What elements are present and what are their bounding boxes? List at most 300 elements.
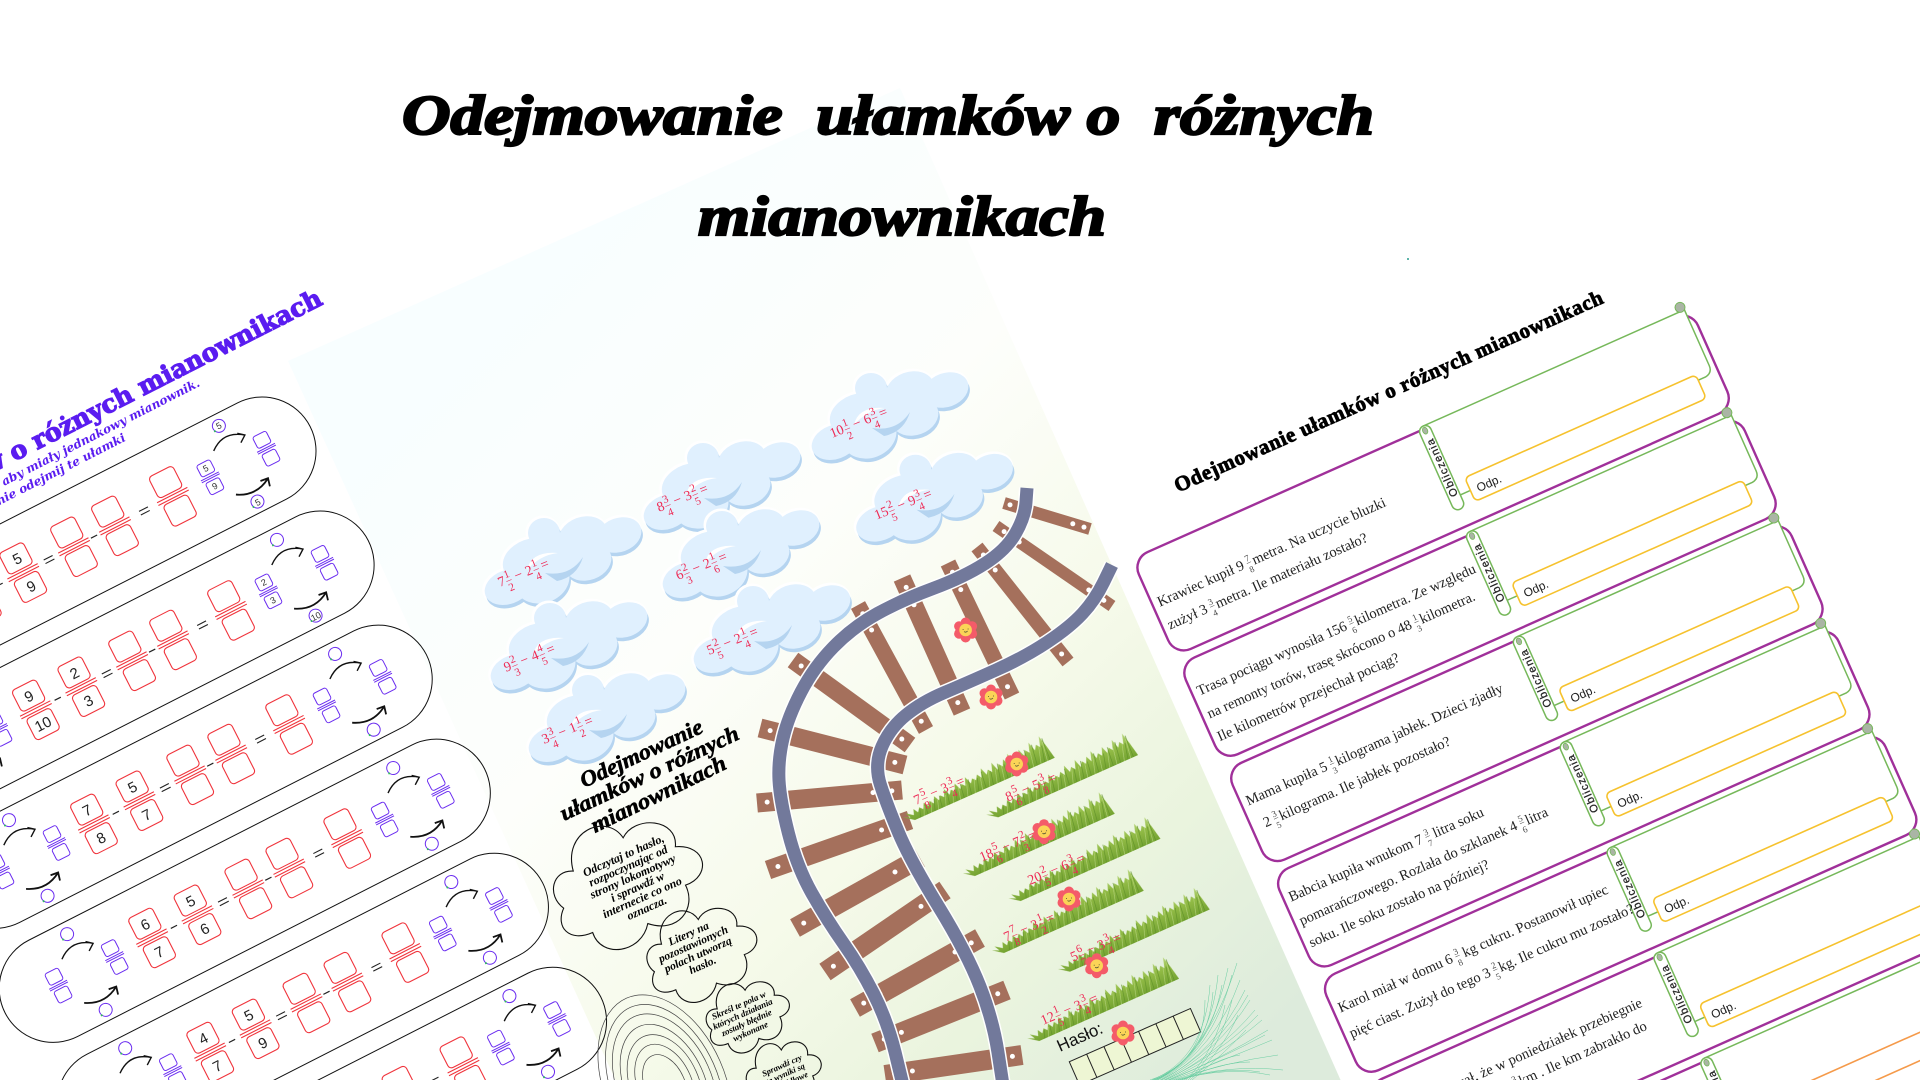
exercise row 5	[39, 835, 567, 1080]
task card 2: 6	[1350, 624, 1359, 635]
cloud exercise 8¾ − 3⅖	[638, 434, 807, 540]
grass exercise 12⅕ − 3¾: 5	[1056, 1016, 1067, 1029]
cloud exercise 7½ − 2¼: =	[538, 557, 551, 574]
small teal dot	[1407, 258, 1409, 260]
grass exercise 5 6/7 − 3¾	[1050, 885, 1210, 976]
cloud exercise 9⅔ − 4⅘: −	[518, 652, 531, 669]
cloud exercise 5⅖ − 2¼: 5	[705, 642, 717, 659]
cloud exercise 15⅖ − 9¾	[850, 445, 1019, 551]
instruction cloud 3: wykonane	[731, 1019, 770, 1043]
grass exercise 8⅚ − 5⅜: –	[1011, 788, 1022, 802]
task card 3: Mama kupiła 5	[1243, 759, 1330, 809]
railway rails	[779, 488, 1112, 1080]
grass exercise 8⅚ − 5⅜	[978, 731, 1138, 821]
middle worksheet background	[288, 88, 1345, 1080]
grass exercise 5 6/7 − 3¾: −	[1085, 942, 1098, 959]
grass exercise 7⅝ − 3¾: −	[928, 785, 941, 802]
instruction cloud 2: polach utworzą	[662, 935, 734, 976]
task card 4: Obliczenia	[1565, 752, 1602, 814]
task card 4: soku. Ile soku zostało na później?	[1307, 857, 1492, 951]
cloud exercise 9⅔ − 4⅘: 9	[502, 659, 514, 676]
task card 5	[1315, 720, 1920, 1077]
exercise row 2	[0, 492, 393, 833]
grass exercise 7⅞ − 3½	[984, 867, 1144, 957]
grass exercise 7⅞ − 3½: 7	[1008, 922, 1018, 936]
main title: Odejmowanie ułamków o różnych	[402, 85, 1374, 147]
cloud exercise 6⅔ − 2⅙: –	[708, 555, 719, 569]
grass exercise 20⅖ − 6¾: 20	[1026, 869, 1044, 889]
grass exercise 18⅚ − 7⅔: =	[1026, 828, 1039, 845]
task card 4: 3	[1422, 826, 1430, 838]
cloud exercise 3¾ − 1½: –	[547, 730, 558, 744]
task card 4: Odp.	[1615, 788, 1644, 811]
task card 1: Krawiec kupił 9	[1155, 558, 1247, 610]
task card 3	[1221, 510, 1828, 866]
cloud exercise 15⅖ − 9¾: 2	[885, 498, 894, 511]
cloud exercise 10½ − 6¾: =	[877, 405, 890, 422]
grass exercise 7⅞ − 3½: 2	[1040, 924, 1050, 937]
task card 3: Odp.	[1568, 682, 1598, 706]
cloud exercise 7½ − 2¼: −	[512, 567, 525, 584]
cloud exercise 3¾ − 1½: –	[574, 719, 585, 733]
task card 4: litra	[1523, 804, 1551, 829]
task card 4: –	[1517, 816, 1526, 828]
grass exercise 18⅚ − 7⅔: –	[991, 845, 1002, 859]
task card 3: 3	[1270, 808, 1279, 819]
cloud exercise 3¾ − 1½: 3	[540, 731, 552, 748]
cloud exercise 7½ − 2¼: –	[503, 573, 514, 587]
task card 4: 5	[1516, 813, 1525, 824]
task card 7	[1408, 931, 1920, 1080]
grass exercise 5 6/7 − 3¾: –	[1076, 948, 1087, 962]
exercise row 2: 2	[259, 577, 268, 588]
task card 3: 2	[1261, 813, 1274, 831]
grass exercise 7⅝ − 3¾: 4	[950, 787, 960, 801]
grass exercise 12⅕ − 3¾: 1	[1051, 1003, 1061, 1016]
grass exercise 8⅚ − 5⅜: –	[1038, 776, 1049, 790]
task card 2: kilometra. Ze względu	[1352, 561, 1478, 629]
cloud exercise 10½ − 6¾: −	[851, 416, 864, 433]
cloud exercise 8¾ − 3⅖: 3	[682, 488, 694, 505]
grass exercise 20⅖ − 6¾: 2	[1038, 863, 1048, 876]
cloud exercise 7½ − 2¼: 1	[502, 568, 511, 581]
cloud exercise 15⅖ − 9¾: 3	[912, 487, 922, 500]
grass exercise 5 6/7 − 3¾: 7	[1080, 955, 1090, 969]
task card 1: –	[1244, 556, 1253, 568]
task card 5: 2	[1489, 960, 1497, 971]
cloud exercise 15⅖ − 9¾: 15	[872, 504, 891, 523]
decorative concentric arcs	[572, 974, 758, 1080]
instruction cloud 1: internecie co ono	[600, 874, 684, 921]
grass exercise 12⅕ − 3¾	[1019, 955, 1179, 1045]
task card 2: Obliczenia	[1471, 541, 1508, 604]
grass exercise 20⅖ − 6¾: =	[1074, 851, 1088, 868]
grass exercise 18⅚ − 7⅔: –	[1018, 834, 1029, 848]
cloud exercise 3¾ − 1½: 2	[578, 727, 588, 740]
task card 2: –	[1411, 615, 1421, 627]
cloud exercise 10½ − 6¾: 4	[873, 418, 883, 432]
green feather ornament	[1150, 963, 1283, 1080]
exercise row 1: 5	[253, 497, 262, 508]
cloud exercise 7½ − 2¼: 4	[534, 570, 544, 583]
instruction cloud 2: Litery na	[666, 920, 711, 949]
grass exercise 7⅝ − 3¾: 5	[918, 786, 928, 799]
cloud exercise 10½ − 6¾: 2	[846, 429, 855, 443]
grass exercise 8⅚ − 5⅜: 6	[1015, 795, 1025, 809]
exercise row 1: 5	[214, 420, 223, 431]
grass exercise 20⅖ − 6¾: –	[1039, 869, 1051, 882]
exercise row 5: 5	[241, 1006, 257, 1025]
cloud exercise 9⅔ − 4⅘: 2	[508, 653, 517, 666]
task card 6: Odp.	[1709, 998, 1738, 1022]
cloud exercise 6⅔ − 2⅙: =	[716, 550, 729, 567]
grass exercise 18⅚ − 7⅔: 6	[995, 853, 1005, 866]
instruction cloud 2: pozostawionych	[656, 924, 730, 966]
task card 3: kilograma jabłek. Dzieci zjadły	[1333, 680, 1506, 769]
exercise row 1: 5	[201, 463, 210, 474]
cloud exercise 3¾ − 1½: 4	[551, 738, 561, 751]
cloud exercise 9⅔ − 4⅘	[485, 594, 654, 700]
task card 1: 8	[1248, 563, 1256, 575]
cloud exercise 15⅖ − 9¾: =	[921, 487, 934, 504]
cloud exercise 3¾ − 1½: 1	[573, 714, 583, 727]
cloud exercise 3¾ − 1½	[523, 666, 692, 772]
railway sleepers	[757, 503, 1112, 1075]
cloud exercise 8¾ − 3⅖: 3	[661, 493, 671, 506]
exercise row 3	[0, 606, 451, 947]
grass exercise 18⅚ − 7⅔: −	[1000, 839, 1013, 856]
exercise row 6	[97, 949, 625, 1080]
task card 2: Ile kilometrów przejechał pociąg?	[1215, 650, 1402, 745]
cloud exercise 5⅖ − 2¼: 4	[743, 638, 753, 651]
exercise row 5: 4	[196, 1030, 211, 1049]
task card 3: –	[1327, 757, 1336, 769]
cloud exercise 10½ − 6¾: 6	[862, 412, 874, 428]
grass exercise 5 6/7 − 3¾: 3	[1101, 931, 1111, 944]
exercise row 3: 8	[94, 829, 109, 848]
grass exercise 18⅚ − 7⅔: 7	[1011, 835, 1023, 851]
grass exercise 12⅕ − 3¾: –	[1052, 1009, 1064, 1022]
cloud exercise 7½ − 2¼: 2	[523, 563, 535, 580]
task card 2: –	[1346, 617, 1356, 628]
task card 5: 5	[1494, 971, 1503, 982]
cloud exercise 6⅔ − 2⅙: 3	[685, 574, 695, 587]
exercise row 4: 7	[152, 943, 167, 962]
cloud exercise 8¾ − 3⅖: –	[662, 498, 673, 512]
cloud exercise 15⅖ − 9¾: 4	[917, 500, 927, 513]
grass exercise 12⅕ − 3¾: 4	[1083, 1004, 1094, 1018]
cloud exercise 8¾ − 3⅖: 2	[688, 482, 698, 495]
cloud exercise 7½ − 2¼: 7	[496, 574, 508, 591]
cloud exercise 5⅖ − 2¼: –	[712, 641, 723, 655]
task card 1	[1127, 299, 1734, 656]
cloud exercise 3¾ − 1½: 1	[567, 720, 579, 737]
task card 1: Obliczenia	[1424, 436, 1461, 498]
cloud exercise 9⅔ − 4⅘: 4	[535, 642, 545, 655]
panel: right worksheet	[1107, 254, 1920, 1080]
password boxes	[1069, 1009, 1201, 1080]
instruction cloud 2: hasło.	[687, 955, 718, 977]
task card 3: kilograma. Ile jabłek pozostało?	[1277, 734, 1453, 824]
task card 1: 7	[1243, 553, 1251, 564]
grass exercise 20⅖ − 6¾: 5	[1043, 876, 1054, 889]
task card 2: Trasa pociągu wynosiła 156	[1195, 619, 1350, 699]
task card 1: metra. Na uczycie bluzki	[1250, 495, 1388, 568]
grass exercise 12⅕ − 3¾: 3	[1078, 991, 1088, 1005]
task card 5: Obliczenia	[1612, 857, 1648, 920]
cloud exercise 9⅔ − 4⅘: 5	[540, 655, 550, 668]
cloud exercise 6⅔ − 2⅙: 6	[712, 563, 722, 576]
grass exercise 20⅖ − 6¾	[1001, 815, 1160, 905]
flowers	[954, 618, 1134, 1046]
cloud exercise 5⅖ − 2¼	[688, 577, 857, 683]
task card 4: 7	[1427, 837, 1435, 848]
cloud exercise 6⅔ − 2⅙: –	[681, 566, 692, 580]
grass exercise 8⅚ − 5⅜: 5	[1030, 777, 1043, 794]
task card 4: Babcia kupiła wnukom 7	[1286, 832, 1426, 905]
task card 5: pięć ciast. Zużył do tego 3	[1347, 965, 1493, 1042]
cloud exercise 6⅔ − 2⅙: −	[690, 560, 703, 577]
instruction cloud 3: Skreśl te pola w	[710, 988, 768, 1022]
instruction cloud 4	[746, 1042, 821, 1080]
cloud exercise 5⅖ − 2¼: 2	[732, 631, 744, 648]
task card 1: 4	[1211, 607, 1220, 618]
task card 3: 1	[1326, 754, 1334, 765]
task card 1: zużył 3	[1165, 601, 1210, 633]
cloud exercise 5⅖ − 2¼: 2	[711, 636, 720, 649]
task card 3: 5	[1275, 819, 1283, 830]
grass exercise 7⅞ − 3½: 7	[1002, 929, 1014, 945]
cloud exercise 3¾ − 1½: =	[582, 714, 595, 731]
grass exercise 5 6/7 − 3¾: =	[1111, 931, 1124, 947]
grass exercise 7⅝ − 3¾: –	[919, 791, 930, 805]
grass exercise 8⅚ − 5⅜: 8	[1003, 789, 1016, 805]
middle worksheet heading: mianownikach	[586, 750, 730, 837]
instruction cloud 1	[553, 823, 703, 950]
task card 1: metra. Ile materiału zostało?	[1213, 530, 1370, 612]
cloud exercise 10½ − 6¾	[806, 364, 975, 470]
exercise row 4: 6	[138, 916, 153, 935]
grass exercise 7⅞ − 3½: =	[1044, 911, 1057, 927]
exercise row 1: 9	[24, 577, 39, 596]
exercise row 5: 9	[256, 1034, 271, 1053]
grass exercise 7⅞ − 3½: –	[1036, 916, 1047, 930]
task card 2: na remonty torów, trasę skrócono o 48	[1205, 617, 1415, 722]
grass exercise 18⅚ − 7⅔: 2	[1017, 828, 1026, 842]
task card 6: Obliczenia	[1659, 963, 1695, 1025]
grass exercise 20⅖ − 6¾: −	[1048, 862, 1061, 879]
cloud exercise 9⅔ − 4⅘: 4	[529, 648, 541, 665]
exercise row 5: 7	[210, 1057, 225, 1076]
cloud exercise 10½ − 6¾: –	[869, 411, 880, 425]
cloud exercise 7½ − 2¼: 2	[507, 581, 517, 594]
cloud exercise 9⅔ − 4⅘: =	[544, 642, 557, 659]
grass exercise 7⅝ − 3¾: –	[946, 780, 957, 794]
task card 5: Odp.	[1662, 893, 1691, 916]
grass exercise 5 6/7 − 3¾: –	[1103, 936, 1114, 950]
grass exercise 5 6/7 − 3¾: 3	[1095, 937, 1108, 954]
cloud exercise 5⅖ − 2¼: −	[721, 635, 734, 652]
grass exercise 7⅞ − 3½: 8	[1013, 935, 1023, 949]
grass exercise 8⅚ − 5⅜: −	[1020, 782, 1033, 799]
exercise row 3: 7	[139, 806, 154, 825]
middle worksheet heading: ułamków o różnych	[556, 720, 743, 826]
grass exercise 7⅞ − 3½: –	[1009, 928, 1020, 942]
grass exercise 5 6/7 − 3¾: 4	[1107, 944, 1117, 957]
task card 5: kg. Ile cukru mu zostało?	[1496, 901, 1637, 975]
grass exercise 12⅕ − 3¾: 3	[1072, 998, 1085, 1014]
grass exercise 7⅝ − 3¾: 8	[923, 799, 933, 812]
cloud exercise 3¾ − 1½: −	[556, 724, 569, 741]
cloud exercise 6⅔ − 2⅙: 6	[674, 567, 686, 584]
task card 4: litra soku	[1430, 805, 1486, 841]
grass exercise 5 6/7 − 3¾: 5	[1068, 949, 1081, 965]
grass exercise 20⅖ − 6¾: 6	[1059, 858, 1072, 874]
exercise row 2: 3	[268, 595, 277, 606]
task card 2	[1174, 404, 1781, 761]
task card 5: kg cukru. Postanowił upiec	[1460, 882, 1611, 961]
cloud exercise 8¾ − 3⅖: 5	[693, 495, 703, 508]
task card 3: Obliczenia	[1518, 647, 1555, 709]
exercise row 3: 7	[80, 802, 95, 820]
task card 1: Odp.	[1474, 472, 1504, 495]
instruction cloud 3: zostały błędnie	[719, 1007, 773, 1039]
cloud exercise 6⅔ − 2⅙: 1	[707, 550, 717, 563]
exercise row 4	[0, 721, 509, 1061]
task card 2: 3	[1415, 623, 1424, 634]
left worksheet instructions: aby miały jednakowy mianownik.	[0, 376, 202, 489]
exercise row 2: 9	[22, 687, 37, 706]
task card 4: 6	[1521, 824, 1530, 835]
task card 4: pomarańczowego. Rozlała do szklanek 4	[1297, 818, 1520, 929]
exercise row 2: 3	[81, 692, 96, 711]
cloud exercise 5⅖ − 2¼: –	[739, 630, 750, 644]
cloud exercise 9⅔ − 4⅘: –	[509, 658, 520, 672]
instruction cloud 1: oznacza.	[625, 893, 669, 923]
cloud exercise 10½ − 6¾: 1	[840, 416, 850, 430]
cloud exercise 8¾ − 3⅖: =	[697, 482, 710, 499]
grass exercise 12⅕ − 3¾: 12	[1039, 1009, 1057, 1029]
instruction cloud 4: Sprawdź czy	[760, 1052, 804, 1079]
cloud exercise 10½ − 6¾: –	[842, 422, 853, 436]
cloud exercise 5⅖ − 2¼: 1	[738, 625, 748, 638]
instruction cloud 1: i sprawdź w	[608, 868, 667, 905]
exercise row 2: 10	[309, 610, 323, 623]
exercise row 1: 5	[10, 550, 25, 569]
task card 3: 3	[1331, 765, 1340, 776]
grass exercise 12⅕ − 3¾: −	[1061, 1002, 1074, 1019]
task card 5: –	[1490, 963, 1500, 975]
instruction cloud 1: rozpoczynając od	[586, 842, 671, 890]
grass exercise 18⅚ − 7⅔	[955, 790, 1115, 880]
grass exercise 20⅖ − 6¾: –	[1066, 857, 1078, 871]
task card 6	[1362, 826, 1920, 1080]
exercise row 1	[0, 378, 335, 719]
cloud exercise 5⅖ − 2¼: 5	[716, 649, 726, 662]
exercise row 2: 10	[32, 713, 55, 736]
grass exercise 7⅝ − 3¾: 7	[912, 792, 924, 809]
right worksheet heading: Odejmowanie ułamków o różnych mianownikach	[1170, 285, 1607, 497]
cloud exercise 8¾ − 3⅖: –	[689, 487, 700, 501]
task card 2: 5	[1346, 613, 1354, 624]
task card 4: –	[1422, 830, 1432, 842]
cloud exercise 7½ − 2¼: –	[530, 562, 541, 576]
cloud exercise 5⅖ − 2¼: =	[747, 625, 760, 642]
password label: Hasło:	[1054, 1019, 1106, 1056]
main title	[402, 85, 1374, 248]
grass exercise 12⅕ − 3¾: =	[1087, 991, 1101, 1008]
grass exercise 7⅞ − 3½: 1	[1035, 911, 1044, 924]
grass exercise 7⅞ − 3½: −	[1018, 922, 1031, 939]
cloud exercise 15⅖ − 9¾: –	[913, 492, 924, 506]
instruction cloud 1: strony lokomotywy	[587, 851, 678, 902]
exercise row 1: 9	[210, 481, 219, 492]
cloud exercise 9⅔ − 4⅘: 3	[513, 666, 523, 679]
grass exercise 18⅚ − 7⅔: 18	[977, 846, 996, 865]
cloud exercise 10½ − 6¾: 10	[828, 423, 846, 442]
grass exercise 12⅕ − 3¾: –	[1079, 997, 1091, 1011]
instruction cloud 1: Odczytaj to hasło,	[580, 831, 666, 880]
task card 5: 3	[1451, 946, 1460, 957]
grass exercise 5 6/7 − 3¾: 6	[1074, 942, 1084, 956]
cloud exercise 15⅖ − 9¾: –	[886, 503, 897, 517]
task card 2: Odp.	[1521, 577, 1551, 600]
grass exercise 7⅝ − 3¾: 3	[939, 781, 951, 797]
cloud exercise 6⅔ − 2⅙: 2	[680, 561, 689, 574]
cloud exercise 7½ − 2¼: 1	[529, 557, 539, 570]
panel: left worksheet	[0, 283, 686, 1080]
cloud exercise 3¾ − 1½: 3	[546, 725, 556, 738]
instruction cloud 3	[706, 982, 789, 1053]
task card 5: –	[1452, 950, 1462, 961]
cloud exercise 8¾ − 3⅖: 4	[666, 506, 676, 519]
cloud exercise 10½ − 6¾: 3	[868, 405, 878, 419]
cloud exercise 9⅔ − 4⅘: –	[536, 647, 547, 661]
grass exercise 7⅝ − 3¾: 3	[945, 774, 955, 788]
grass exercise 8⅚ − 5⅜: =	[1046, 771, 1059, 787]
task card 5: 8	[1456, 957, 1465, 968]
task card 2: kilometra.	[1417, 589, 1478, 628]
grass exercise 18⅚ − 7⅔: 5	[990, 840, 1000, 853]
exercise row 4: 5	[183, 892, 199, 911]
instruction cloud 3: których działania	[711, 996, 774, 1032]
grass exercise 8⅚ − 5⅜: 5	[1009, 782, 1019, 796]
exercise row 4: 6	[197, 920, 213, 939]
grass exercise 20⅖ − 6¾: 4	[1070, 864, 1081, 878]
grass exercise 7⅞ − 3½: 3	[1029, 917, 1041, 934]
cloud exercise 8¾ − 3⅖: 8	[655, 499, 667, 516]
cloud exercise 15⅖ − 9¾: −	[895, 497, 908, 514]
grass exercise 7⅝ − 3¾: =	[954, 774, 967, 791]
cloud exercise 15⅖ − 9¾: 5	[890, 511, 900, 524]
instruction cloud 2	[647, 908, 757, 1002]
cloud exercise 15⅖ − 9¾: 9	[906, 493, 918, 510]
task card 1: –	[1207, 600, 1217, 611]
task card 1: 3	[1206, 596, 1215, 607]
cloud exercise 8¾ − 3⅖: −	[671, 492, 684, 509]
task card 3: –	[1271, 812, 1280, 823]
exercise row 2: 2	[67, 664, 82, 683]
cloud exercise 6⅔ − 2⅙	[657, 502, 826, 608]
cloud exercise 7½ − 2¼	[479, 509, 648, 615]
grass exercise 8⅚ − 5⅜: 8	[1042, 784, 1052, 797]
grass exercise 20⅖ − 6¾: 3	[1065, 851, 1075, 865]
task card 2: 1	[1411, 612, 1419, 623]
grass exercise 7⅝ − 3¾	[895, 734, 1055, 824]
cloud exercise 6⅔ − 2⅙: 2	[701, 556, 713, 573]
middle worksheet heading: Odejmowanie	[576, 714, 707, 793]
task card 5: Karol miał w domu 6	[1336, 951, 1455, 1016]
